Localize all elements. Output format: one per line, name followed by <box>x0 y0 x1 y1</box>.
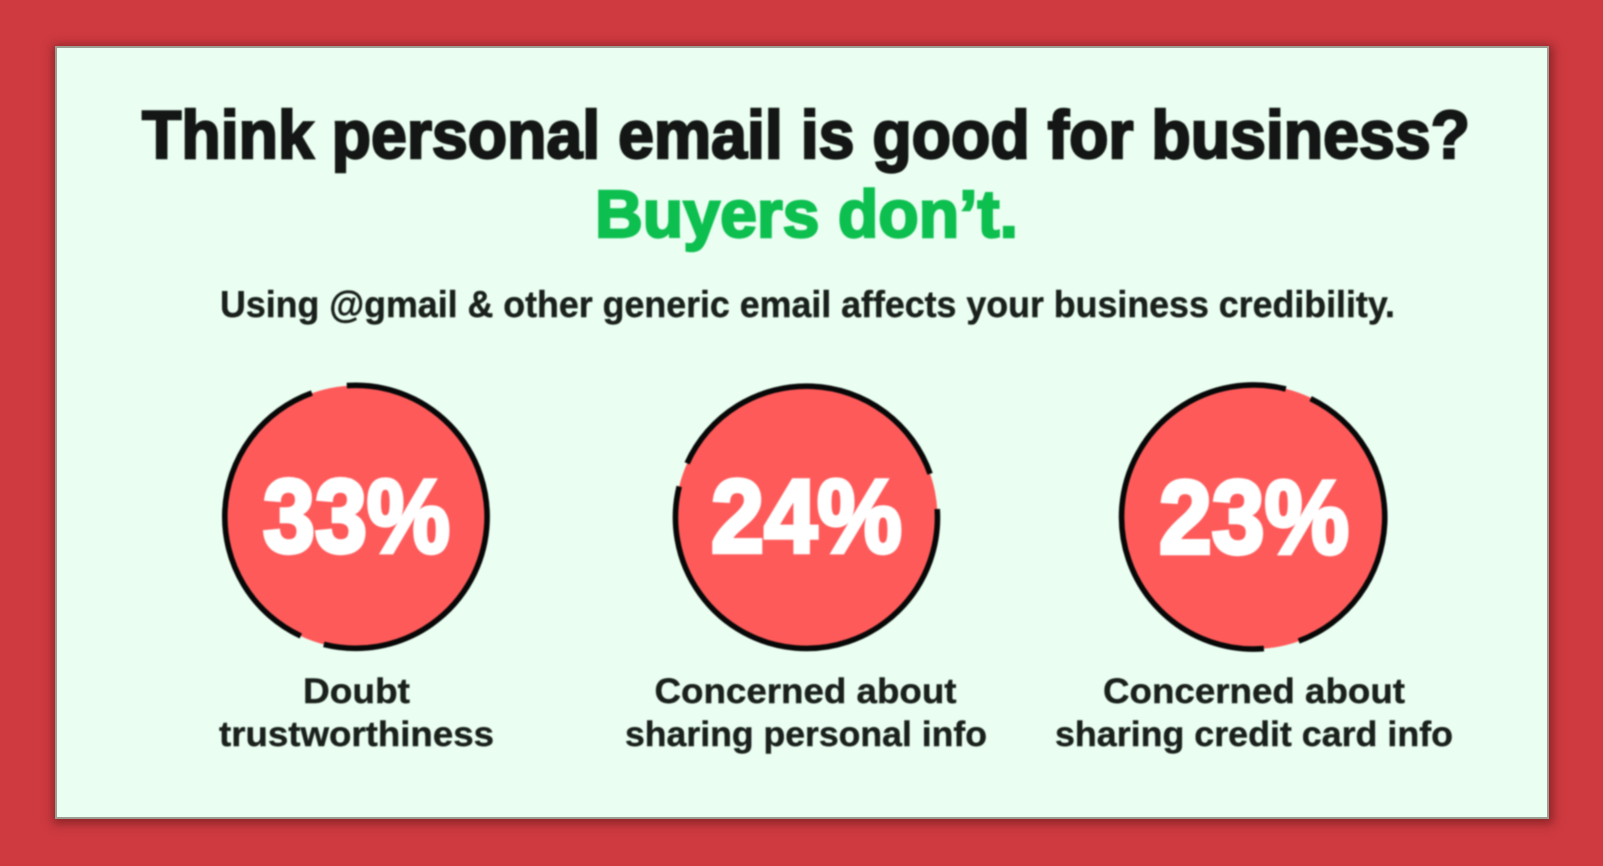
label: concerned about sharing personal info <box>625 672 987 754</box>
label: doubt trustworthiness: trustworthiness <box>219 715 494 754</box>
circle: 24% <box>675 386 938 648</box>
label: concerned about sharing credit card info: Concerned about <box>1103 672 1405 711</box>
title: Think personal email is good for business? <box>142 97 1470 173</box>
stat: 33% doubt trustworthiness <box>219 385 494 754</box>
circle: 23% <box>1122 385 1386 649</box>
number: 23%: 23% <box>1159 460 1349 576</box>
stat: 23% concerned about credit card info <box>1055 385 1453 754</box>
subtitle: Using @gmail & other generic email affects your business credibility. <box>220 284 1395 325</box>
label: concerned about sharing credit card info <box>1055 672 1453 754</box>
number: 24%: 24% <box>711 459 902 575</box>
label: concerned about sharing personal info: sharing personal info <box>625 715 987 754</box>
number: 33%: 33% <box>263 459 450 575</box>
label: doubt trustworthiness: Doubt <box>303 672 410 711</box>
label: concerned about sharing credit card info: sharing credit card info <box>1055 715 1453 754</box>
highlighted heading: Buyers don’t. <box>595 177 1018 252</box>
stat: 24% concerned about personal info <box>625 386 987 754</box>
label: concerned about sharing personal info: Concerned about <box>654 672 957 711</box>
label: doubt trustworthiness <box>219 672 494 754</box>
circle: 33% <box>225 385 488 648</box>
